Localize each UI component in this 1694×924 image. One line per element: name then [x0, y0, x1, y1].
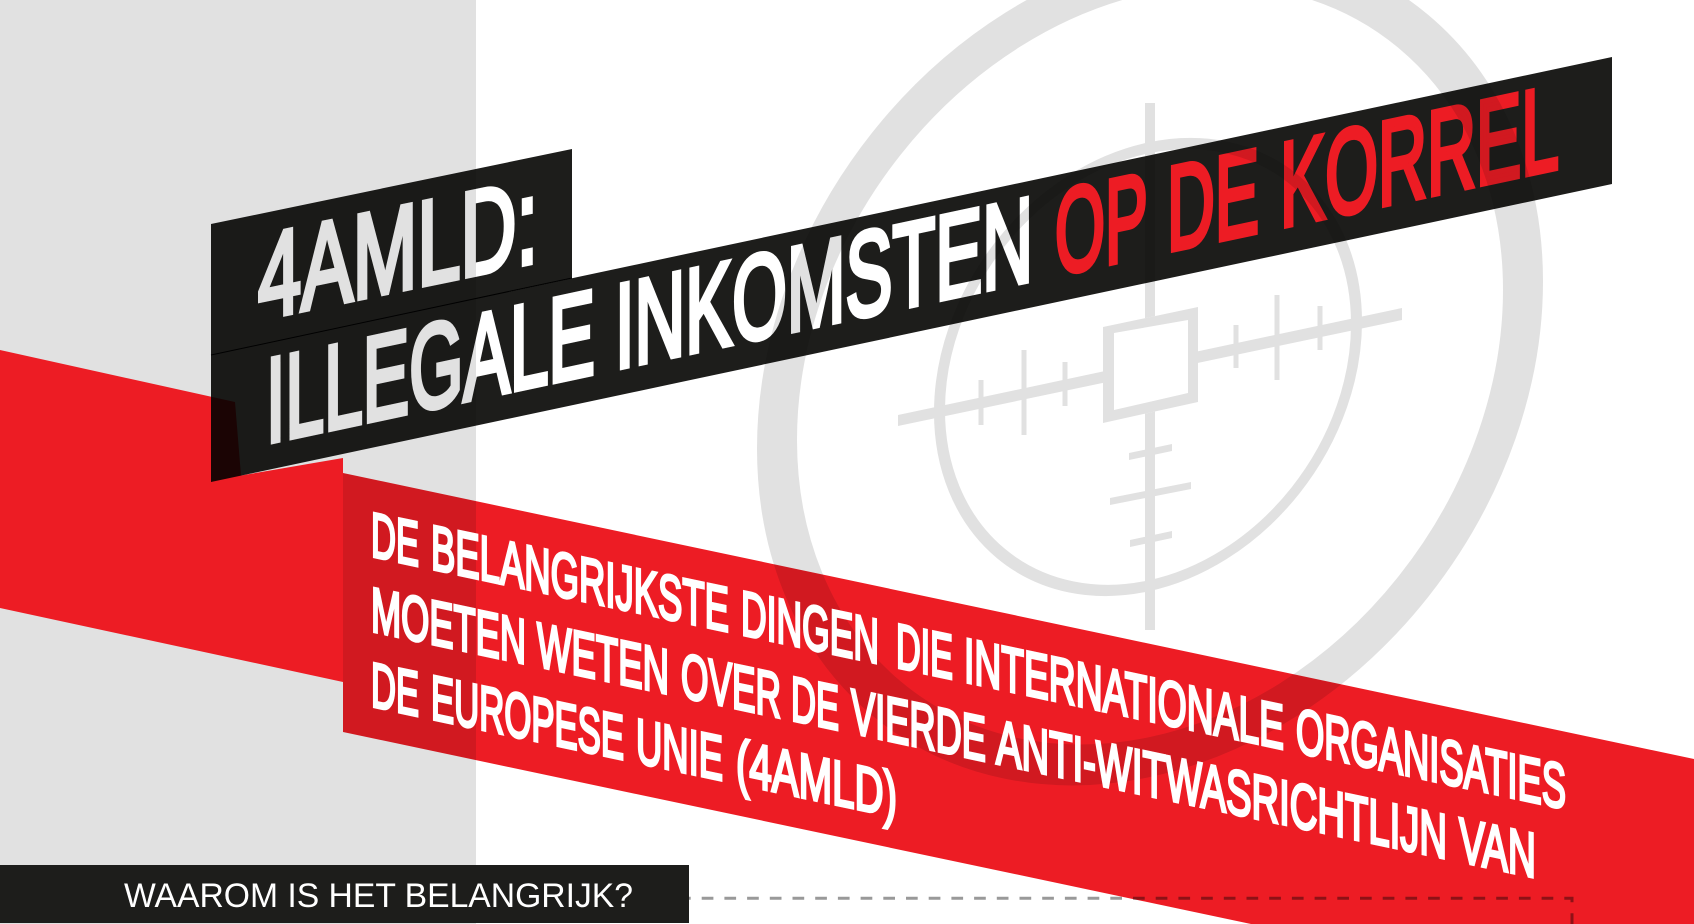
title highlight: op de korrel [1055, 59, 1559, 301]
title banner [211, 57, 1612, 482]
icon: crosshair sight [777, 0, 1523, 836]
title line: illegale inkomsten: ILLEGALE [266, 264, 595, 469]
subtitle line 2: DE [791, 664, 839, 744]
title line: illegale inkomsten: INKOMSTEN [615, 171, 1033, 394]
title line: 4AMLD:: 4AMLD: [258, 152, 538, 345]
title line: illegale inkomsten [266, 171, 1033, 469]
lower scale ticks [1110, 444, 1191, 547]
subtitle line 3: UNIE [636, 706, 723, 794]
banner block: first line [211, 149, 572, 355]
subtitle line 2: WETEN [537, 610, 669, 708]
horizontal crosshair line [898, 308, 1402, 426]
left scale ticks [978, 350, 1068, 435]
seam between banner blocks [211, 278, 572, 355]
subtitle line 2 [371, 575, 1536, 892]
outer ring of the sight [777, 0, 1523, 836]
subtitle line 1: DE [371, 500, 419, 580]
subtitle line 1: DIE [896, 611, 953, 693]
right scale ticks [1234, 295, 1322, 380]
dashed content frame [679, 898, 1572, 924]
inner ring of the sight [940, 104, 1356, 630]
subtitle line 2: VAN [1459, 805, 1536, 892]
subtitle line 1: INTERNATIONALE [964, 625, 1284, 763]
subtitle line 3 [371, 650, 897, 831]
subtitle line 2: MOETEN [371, 575, 526, 678]
vertical crosshair line [1145, 103, 1155, 630]
section heading bar [0, 865, 689, 923]
subtitle line 1 [371, 500, 1566, 823]
heading text: WAAROM IS HET BELANGRIJK? [124, 877, 633, 915]
heading bar background [0, 865, 689, 923]
panel: grey left column [0, 0, 476, 924]
title highlight: op de korrel: OP [1055, 147, 1148, 301]
left red band [0, 350, 343, 682]
subtitle line 3: DE [371, 650, 419, 730]
subtitle line 1: DINGEN [741, 578, 879, 677]
subtitle line 3: EUROPESE [431, 662, 624, 773]
subtitle line 2: OVER [681, 640, 781, 732]
subtitle line 1: BELANGRIJKSTE [431, 512, 729, 646]
banner block: second line [211, 57, 1612, 482]
main red band [343, 473, 1694, 924]
centre square of the sight [1103, 307, 1198, 423]
title highlight: op de korrel: DE [1167, 123, 1259, 277]
subtitle line 2: VIERDE [851, 676, 986, 775]
subtitle text [371, 500, 1566, 892]
subtitle line 3: (4AMLD) [736, 727, 897, 831]
